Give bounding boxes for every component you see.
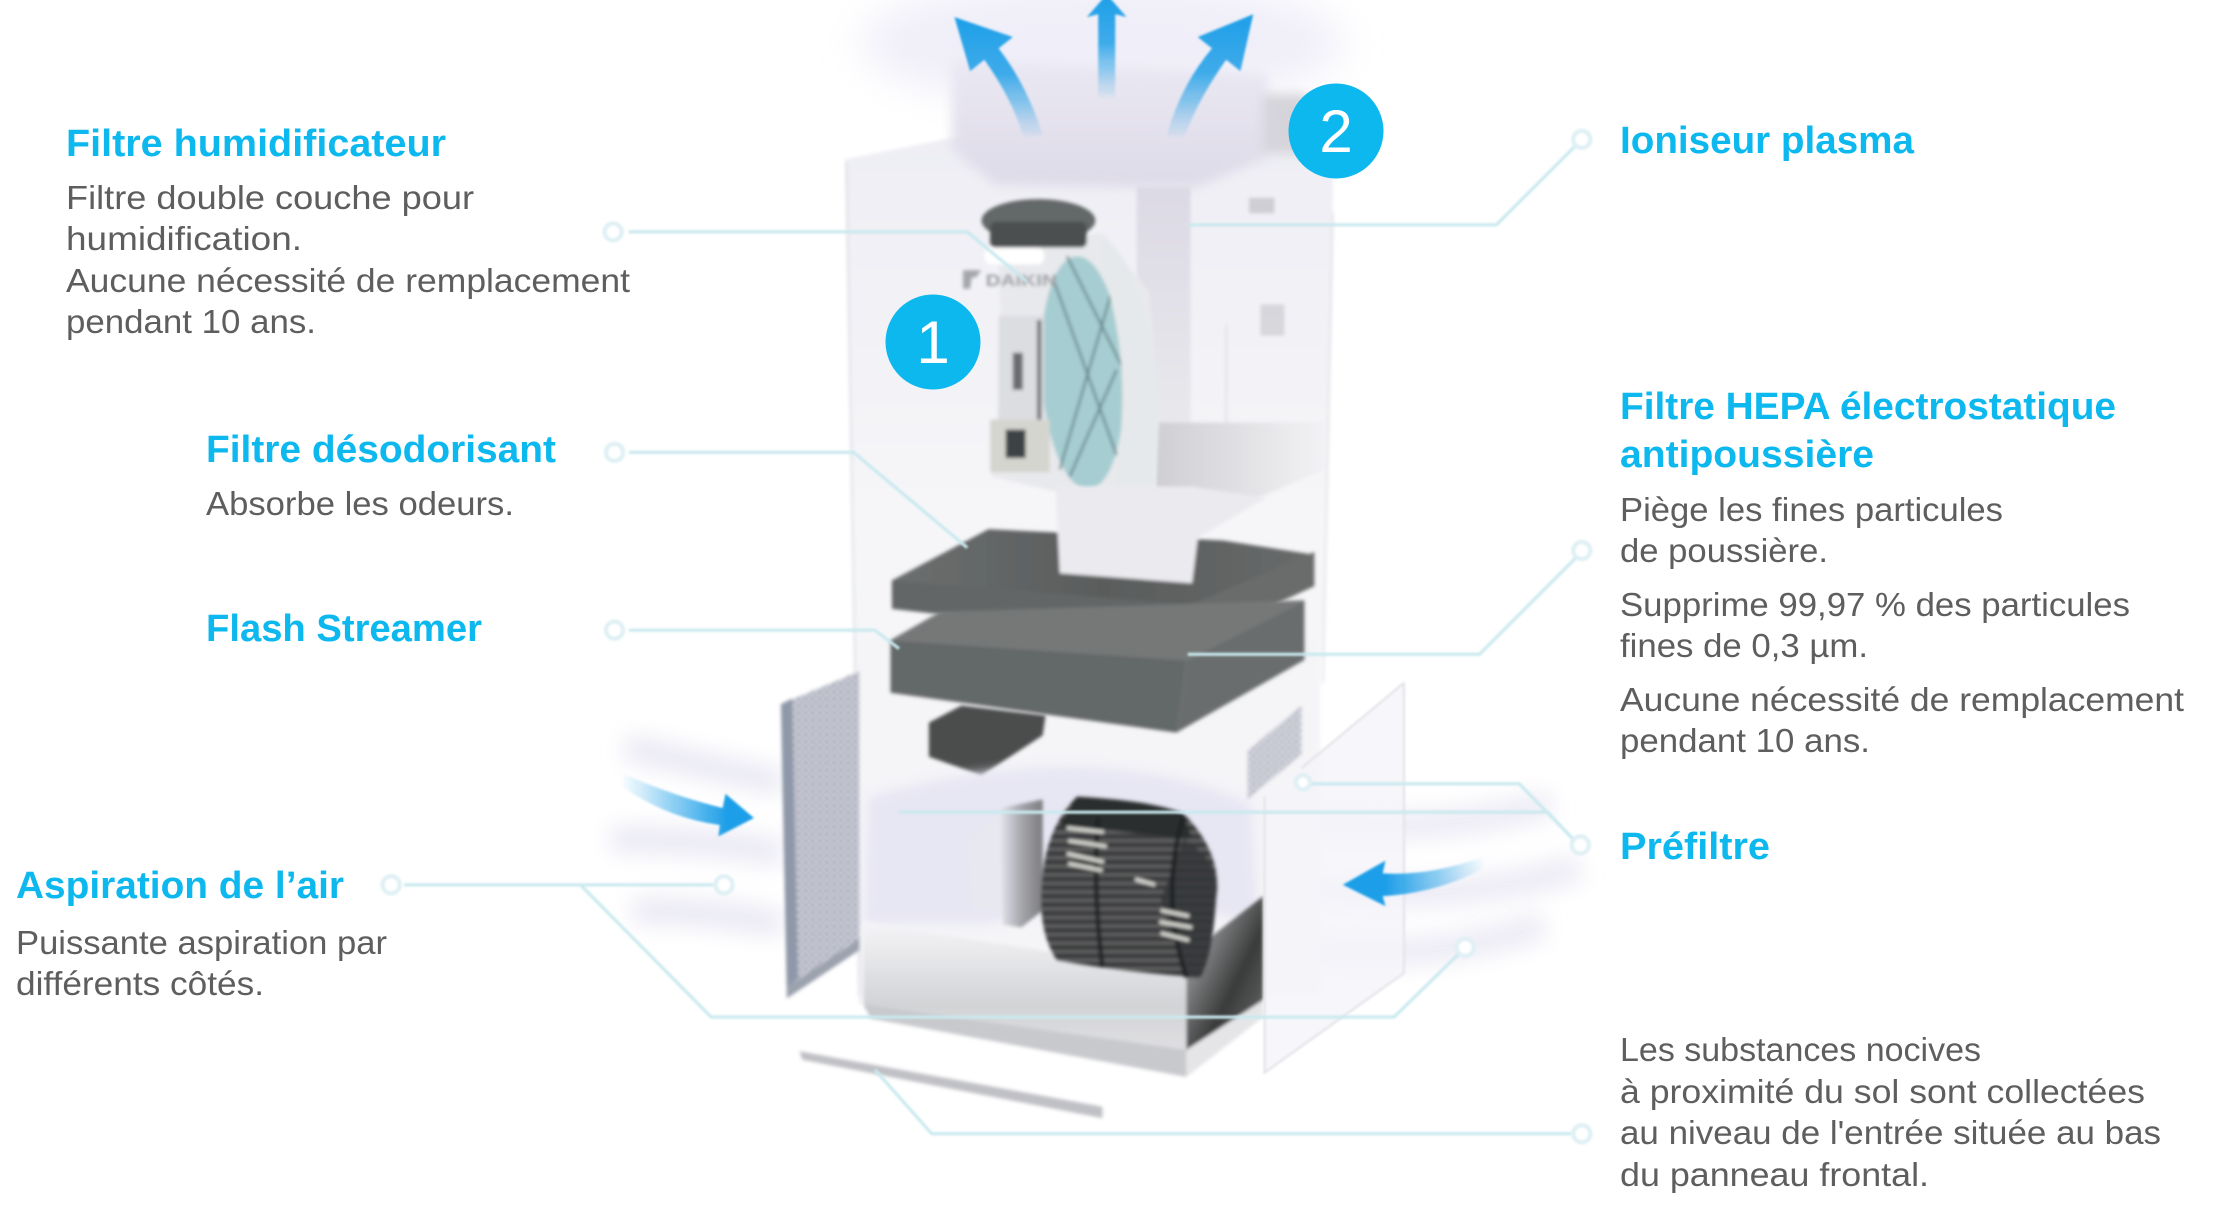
badge 1 [886,294,980,390]
icon: left air intake arrow [620,774,754,836]
fan housing base [863,896,1263,1077]
text block: Filtre HEPA [1620,386,2184,759]
logo [963,270,1057,290]
air haze background [861,0,1344,107]
text block: Aspiration de l'air: Puissante aspiration par [16,924,387,961]
text block: Filtre HEPA: antipoussière [1620,434,1874,476]
airflow streaks left [612,747,782,925]
text block: substances nocives [1620,1031,2161,1193]
text block: Filtre HEPA: fines de 0,3 µm. [1620,627,1868,664]
badge 2 [1288,84,1384,178]
deodorizing filter plate [892,486,1314,643]
heading: Ioniseur plasma: Ioniseur plasma [1620,120,1915,162]
airflow streaks right [1266,804,1579,953]
text block: Filtre désodorisant: Absorbe les odeurs. [206,485,514,522]
text block: substances nocives: au niveau de l'entrée située au bas [1620,1114,2161,1151]
inner right mesh [1248,706,1302,799]
text block: Aspiration de l'air [16,865,387,1002]
leader markers [383,131,1590,1142]
heading: Flash Streamer: Flash Streamer [206,608,482,650]
text block: substances nocives: Les substances nocives [1620,1031,1981,1068]
text block: Filtre HEPA: de poussière. [1620,532,1828,569]
badge 1: 1 [916,309,950,376]
badge 2: 2 [1319,98,1353,165]
bottom air intake strip [799,1051,1102,1118]
text block: Filtre humidificateur: humidification. [66,220,302,257]
blower fan [967,797,1217,977]
text block: Filtre humidificateur: Filtre humidificateur [66,123,446,165]
airflow streaks inside [863,766,1259,925]
left mesh prefilter [781,671,859,999]
text block: Filtre humidificateur: Filtre double couche pour [66,179,474,216]
heading: Préfiltre: Préfiltre [1620,826,1770,868]
text block: Filtre humidificateur: pendant 10 ans. [66,303,316,340]
icon: top airflow arrows [954,0,1253,139]
logo: DAIKIN [986,271,1057,290]
text block: Filtre HEPA: Aucune nécessité de remplacement [1620,681,2184,718]
HEPA filter plate [890,600,1304,733]
text block: substances nocives: du panneau frontal. [1620,1156,1929,1193]
text block: Filtre HEPA: Piège les fines particules [1620,491,2003,528]
text block: substances nocives: à proximité du sol sont collectées [1620,1073,2145,1110]
text block: Aspiration de l'air: Aspiration de l’air [16,865,344,907]
text block: Filtre humidificateur [66,123,630,340]
text block: Filtre désodorisant: Filtre désodorisant [206,429,556,471]
leader lines [404,142,1579,1134]
text block: Filtre HEPA: Filtre HEPA électrostatique [1620,386,2116,428]
vapor outlet [952,60,1309,188]
cabinet body [845,137,1333,1010]
text block: Filtre HEPA: pendant 10 ans. [1620,722,1870,759]
right side panel [1265,683,1404,1073]
Flash Streamer module [929,706,1046,775]
text block: Filtre humidificateur: Aucune nécessité de remplacement [66,262,630,299]
text block: Filtre HEPA: Supprime 99,97 % des particules [1620,586,2130,623]
humidifier filter wheel [963,199,1159,491]
product diagram [383,0,1590,1142]
text block: Aspiration de l'air: différents côtés. [16,965,264,1002]
text block: Filtre désodorisant [206,429,556,522]
icon: right air intake arrow [1343,856,1485,906]
